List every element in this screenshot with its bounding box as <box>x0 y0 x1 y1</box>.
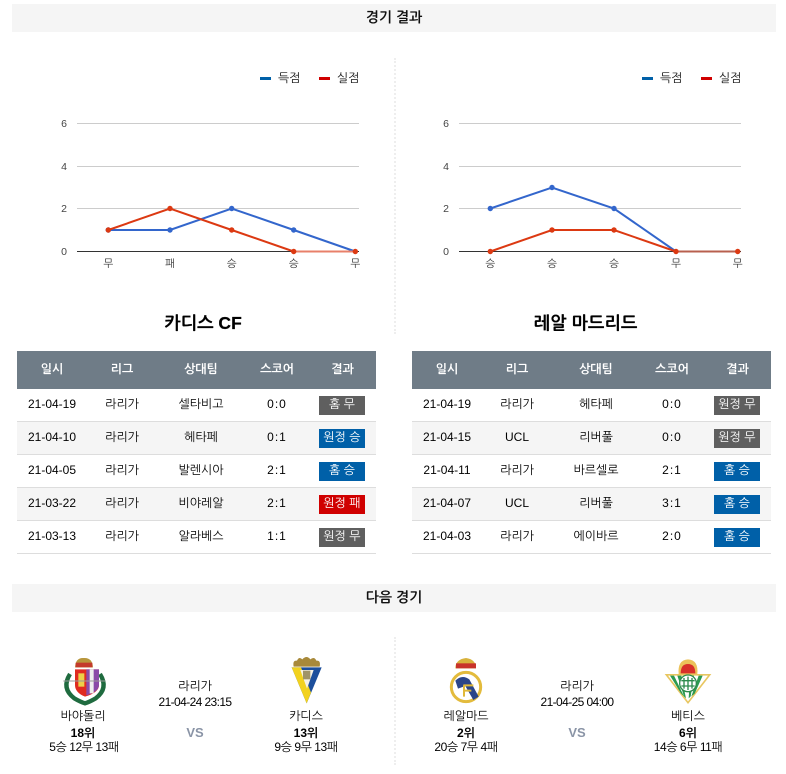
table header: 결과 <box>726 362 749 376</box>
line chart: Real Madrid: 0 <box>443 246 449 258</box>
text: Betis record: 14승 6무 11패 <box>654 740 722 754</box>
text: Betis name: 베티스 <box>671 709 705 723</box>
row 5: 라리가 <box>105 529 139 543</box>
row 3: 2:1 <box>662 463 682 477</box>
row 2 <box>412 422 771 455</box>
table: Real Madrid recent matches <box>412 351 771 554</box>
table header <box>412 351 771 389</box>
text: Valladolid rank: 18위 <box>71 726 95 740</box>
row 5: 홈 승 <box>724 529 750 543</box>
row 4: 리버풀 <box>579 496 613 510</box>
text: Cadiz name: 카디스 <box>289 709 323 723</box>
row 2 <box>17 422 376 455</box>
row 1: 라리가 <box>105 397 139 411</box>
row 2: 헤타페 <box>184 430 218 444</box>
legend: Real Madrid chart: 실점 <box>719 71 742 85</box>
line chart: Cadiz CF: 6 <box>61 118 67 130</box>
row 5: 원정 무 <box>323 529 361 543</box>
line chart: Real Madrid <box>443 71 743 270</box>
table header: 결과 <box>331 362 354 376</box>
series: goals scored <box>106 206 355 252</box>
table header: 일시 <box>436 362 458 376</box>
row 5: 에이바르 <box>573 529 619 543</box>
text: Cadiz record: 9승 9무 13패 <box>274 740 338 754</box>
row 5: 21-04-03 <box>423 529 471 543</box>
row 2: 원정 무 <box>718 430 756 444</box>
series: goals conceded <box>106 206 358 254</box>
text: Real Madrid record: 20승 7무 4패 <box>434 740 498 754</box>
row 4: 라리가 <box>105 496 139 510</box>
row 3: 라리가 <box>105 463 139 477</box>
table header: 리그 <box>506 362 528 376</box>
line chart: Cadiz CF <box>61 71 360 270</box>
line chart: Cadiz CF: 2 <box>61 203 67 215</box>
heading: match results <box>12 4 776 32</box>
table: Cadiz recent matches <box>17 351 376 554</box>
heading: next match: 다음 경기 <box>366 589 422 605</box>
row 3 <box>412 455 771 488</box>
line chart: Cadiz CF: 승 <box>289 258 299 270</box>
row 1: 홈 무 <box>329 397 355 411</box>
row 2: 리버풀 <box>579 430 613 444</box>
text: Cadiz rank: 13위 <box>294 726 318 740</box>
row 3: 홈 승 <box>329 463 355 477</box>
heading: next match <box>12 584 776 612</box>
row 4: 비야레알 <box>178 496 224 510</box>
row 1: 21-04-19 <box>28 397 76 411</box>
row 4 <box>17 488 376 521</box>
row 2: 원정 승 <box>323 430 361 444</box>
text: match 1 league: 라리가 <box>178 679 212 693</box>
icon: Cadiz crest <box>292 657 322 704</box>
table header: 리그 <box>111 362 133 376</box>
line chart: Real Madrid: 승 <box>609 258 619 270</box>
text: match 2 date: 21-04-25 04:00 <box>540 695 614 709</box>
row 5: 라리가 <box>500 529 534 543</box>
table header <box>17 351 376 389</box>
row 4: 홈 승 <box>724 496 750 510</box>
line chart: Real Madrid: 승 <box>485 258 495 270</box>
line chart: Real Madrid: 2 <box>443 203 449 215</box>
line chart: Real Madrid: 승 <box>547 258 557 270</box>
icon: Real Madrid crest <box>450 658 482 704</box>
row 2: 0:0 <box>662 430 682 444</box>
row 3: 21-04-11 <box>423 463 471 477</box>
row 3: 라리가 <box>500 463 534 477</box>
line chart: Real Madrid: 무 <box>733 258 743 270</box>
table header: 일시 <box>41 362 63 376</box>
row 2: 21-04-15 <box>423 430 471 444</box>
row 3: 바르셀로 <box>573 463 619 477</box>
line chart: Cadiz CF: 무 <box>103 258 113 270</box>
team title: Real Madrid: 레알 마드리드 <box>534 313 637 333</box>
text: match 1 VS: VS <box>186 725 204 740</box>
row 1: 셀타비고 <box>178 397 224 411</box>
row 4 <box>412 488 771 521</box>
row 5: 21-03-13 <box>28 529 76 543</box>
row 5: 2:0 <box>662 529 682 543</box>
line chart: Real Madrid: 4 <box>443 161 449 173</box>
table header: 상대팀 <box>184 362 218 376</box>
row 5 <box>17 521 376 554</box>
line chart: Cadiz CF: 무 <box>350 258 360 270</box>
row 4: 3:1 <box>662 496 682 510</box>
table header: 스코어 <box>655 362 689 376</box>
line chart: Real Madrid: 무 <box>671 258 681 270</box>
text: match 1 date: 21-04-24 23:15 <box>158 695 232 709</box>
text: match 2 VS: VS <box>568 725 586 740</box>
row 3: 21-04-05 <box>28 463 76 477</box>
line chart: Cadiz CF: 0 <box>61 246 67 258</box>
row 4: UCL <box>505 496 529 510</box>
row 2: 라리가 <box>105 430 139 444</box>
row 5: 1:1 <box>267 529 287 543</box>
row 3: 홈 승 <box>724 463 750 477</box>
row 5: 알라베스 <box>178 529 224 543</box>
text: Betis rank: 6위 <box>679 726 697 740</box>
text: Valladolid name: 바야돌리 <box>60 709 106 723</box>
icon: Betis crest <box>664 659 712 704</box>
legend: Cadiz chart: 실점 <box>337 71 360 85</box>
row 5 <box>412 521 771 554</box>
row 2: UCL <box>505 430 529 444</box>
row 1 <box>17 389 376 422</box>
text: Valladolid record: 5승 12무 13패 <box>49 740 119 754</box>
row 1: 0:0 <box>267 397 287 411</box>
team title: Cadiz CF: 카디스 CF <box>164 313 242 333</box>
row 3 <box>17 455 376 488</box>
text: Real Madrid rank: 2위 <box>457 726 475 740</box>
series: goals scored <box>488 185 676 252</box>
row 4: 21-04-07 <box>423 496 471 510</box>
row 1: 헤타페 <box>579 397 613 411</box>
line chart: Cadiz CF: 패 <box>165 258 175 270</box>
legend: Real Madrid chart: 득점 <box>660 71 683 85</box>
legend: Cadiz chart <box>260 71 360 85</box>
heading: match results: 경기 결과 <box>366 9 422 25</box>
row 4: 21-03-22 <box>28 496 76 510</box>
series: goals conceded <box>488 227 740 254</box>
row 2: 21-04-10 <box>28 430 76 444</box>
icon: Valladolid crest <box>63 658 106 706</box>
row 4: 2:1 <box>267 496 287 510</box>
legend: Real Madrid chart <box>642 71 742 85</box>
text: match 2 league: 라리가 <box>560 679 594 693</box>
line chart: Cadiz CF: 승 <box>227 258 237 270</box>
row 1 <box>412 389 771 422</box>
row 2: 0:1 <box>267 430 287 444</box>
row 1: 21-04-19 <box>423 397 471 411</box>
legend: Cadiz chart: 득점 <box>278 71 301 85</box>
row 4: 원정 패 <box>323 496 361 510</box>
table header: 상대팀 <box>579 362 613 376</box>
line chart: Real Madrid: 6 <box>443 118 449 130</box>
line chart: Cadiz CF: 4 <box>61 161 67 173</box>
text: Real Madrid name: 레알마드 <box>443 709 489 723</box>
table header: 스코어 <box>260 362 294 376</box>
row 1: 라리가 <box>500 397 534 411</box>
row 3: 2:1 <box>267 463 287 477</box>
row 1: 0:0 <box>662 397 682 411</box>
row 1: 원정 무 <box>718 397 756 411</box>
row 3: 발렌시아 <box>178 463 224 477</box>
